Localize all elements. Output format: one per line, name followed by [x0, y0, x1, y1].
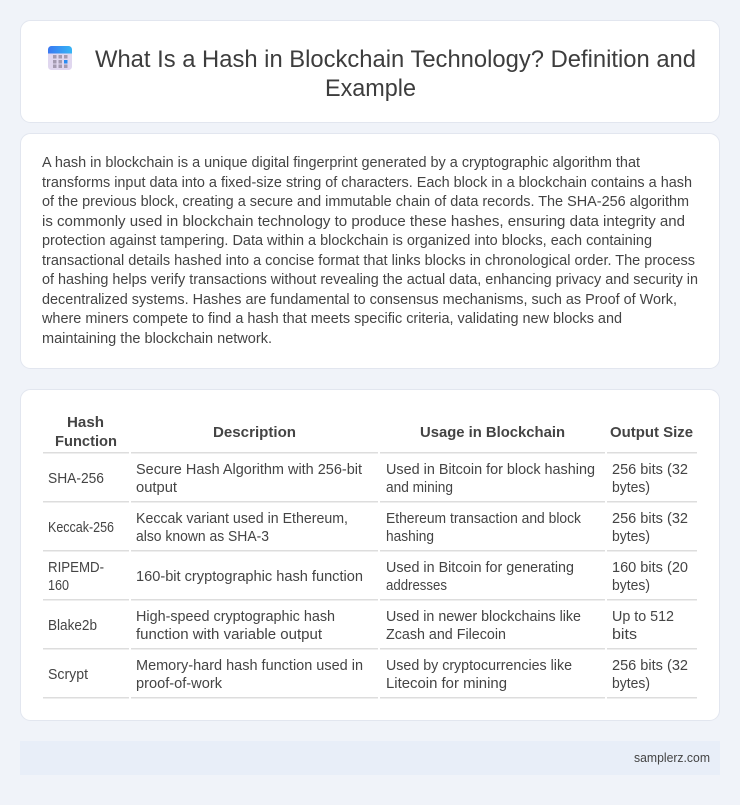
row: Blake2b: function with variable output — [136, 627, 322, 643]
table header — [55, 414, 693, 450]
text block: definition of a hash: of hashing helps verify transactions without revealing the actual data, enhancing privacy and security in — [42, 272, 698, 288]
row: Scrypt — [48, 658, 688, 692]
row: Keccak-256: bytes) — [612, 529, 650, 545]
row: RIPEMD-160: 160 — [48, 578, 69, 594]
row: Blake2b: Up to 512 — [612, 609, 674, 625]
row: Scrypt: Litecoin for mining — [386, 676, 507, 692]
footer: samplerz.com — [634, 750, 710, 765]
icon: calendar — [48, 46, 72, 70]
row: SHA-256: Used in Bitcoin for block hashing — [386, 462, 595, 478]
table header: Function — [55, 433, 117, 450]
text block: definition of a hash: protection against tampering. Data within a blockchain is organized into blocks, each containing — [42, 233, 652, 249]
row: Scrypt: Used by cryptocurrencies like — [386, 658, 572, 674]
row: Keccak-256: Keccak variant used in Ethereum, — [136, 511, 348, 527]
row: Keccak-256 — [48, 511, 688, 545]
text block: definition of a hash: is commonly used in blockchain technology to produce these hashes, ensuring data integrity and — [42, 214, 685, 230]
row: Keccak-256: also known as SHA-3 — [136, 529, 269, 545]
panel: hash function table — [20, 390, 720, 720]
table header: Output Size — [610, 424, 693, 441]
row: Blake2b: Zcash and Filecoin — [386, 627, 506, 643]
row: Keccak-256: 256 bits (32 — [612, 511, 688, 527]
text block: definition of a hash: maintaining the blockchain network. — [42, 331, 272, 347]
row: SHA-256: 256 bits (32 — [612, 462, 688, 478]
text block: definition of a hash: transactional details hashed into a concise format that links blocks in chronological order. The process — [42, 253, 695, 269]
row: Scrypt: 256 bits (32 — [612, 658, 688, 674]
text block: definition of a hash: where miners compete to find a hash that meets specific criteria, validating new blocks and — [41, 311, 622, 327]
text block: definition of a hash: transforms input data into a fixed-size string of characters. Each block in a blockchain contains a hash — [42, 175, 692, 191]
row: Blake2b: bits — [612, 627, 637, 643]
panel: intro paragraph — [20, 134, 720, 368]
row: RIPEMD-160 — [48, 560, 688, 594]
table header: Hash — [67, 414, 104, 431]
row: RIPEMD-160: RIPEMD- — [48, 560, 104, 576]
row: Keccak-256: hashing — [386, 529, 434, 545]
row: SHA-256: and mining — [386, 480, 453, 496]
footer — [20, 741, 720, 775]
row: RIPEMD-160: addresses — [386, 578, 447, 594]
heading — [95, 46, 696, 102]
panel: title — [20, 20, 720, 122]
text block: definition of a hash: of the previous block, creating a secure and immutable chain of data records. The SHA-256 algorithm — [42, 194, 689, 210]
text block: definition of a hash — [41, 155, 698, 347]
row: SHA-256: Secure Hash Algorithm with 256-bit — [136, 462, 362, 478]
row: SHA-256 — [48, 462, 688, 496]
row: RIPEMD-160: 160 bits (20 — [612, 560, 688, 576]
row: SHA-256: SHA-256 — [48, 471, 104, 487]
row: RIPEMD-160: Used in Bitcoin for generating — [386, 560, 574, 576]
text block: definition of a hash: A hash in blockchain is a unique digital fingerprint generated by a cryptographic algorithm that — [42, 155, 640, 171]
row: RIPEMD-160: 160-bit cryptographic hash function — [136, 569, 363, 585]
row: SHA-256: bytes) — [612, 480, 650, 496]
row: Blake2b — [48, 609, 674, 643]
row: SHA-256: output — [136, 480, 177, 496]
table header: Usage in Blockchain — [420, 424, 565, 441]
row: Blake2b: High-speed cryptographic hash — [136, 609, 335, 625]
row: Blake2b: Blake2b — [48, 618, 97, 634]
row: Keccak-256: Ethereum transaction and block — [386, 511, 582, 527]
row: Scrypt: bytes) — [612, 676, 650, 692]
row: RIPEMD-160: bytes) — [612, 578, 650, 594]
heading: What Is a Hash in Blockchain Technology? Definition and — [95, 46, 696, 73]
row: Scrypt: proof-of-work — [136, 676, 223, 692]
row: Blake2b: Used in newer blockchains like — [386, 609, 581, 625]
row: Keccak-256: Keccak-256 — [48, 520, 114, 536]
text block: definition of a hash: decentralized systems. Hashes are fundamental to consensus mechanisms, such as Proof of Work, — [42, 292, 677, 308]
heading: Example — [325, 75, 416, 102]
table header: Description — [213, 424, 296, 441]
row: Scrypt: Scrypt — [48, 667, 88, 683]
row: Scrypt: Memory-hard hash function used in — [136, 658, 363, 674]
